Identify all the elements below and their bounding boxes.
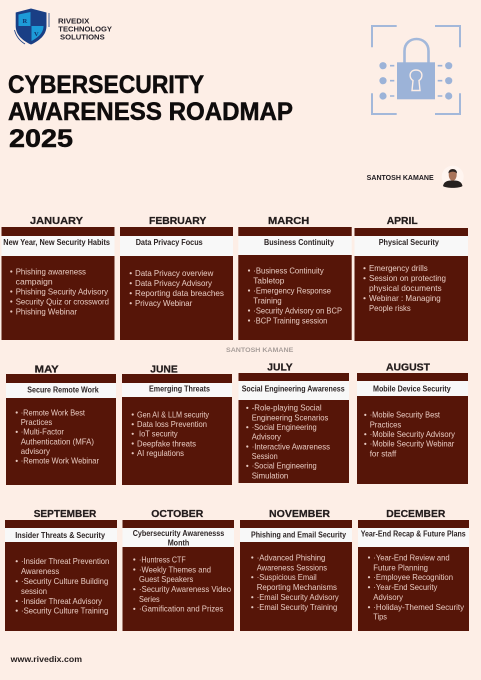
month heading: November: NOVEMBER [269,508,330,520]
card: March [238,215,352,340]
panel background: November [240,520,352,631]
month heading: February: FEBRUARY [149,215,206,227]
theme: October: Month [168,538,190,547]
activities: January: Phishing awareness [16,266,86,276]
card: April [354,215,468,341]
activities: March: ·Business Continuity [253,265,324,275]
author name: SANTOSH KAMANE [367,175,434,182]
activities: December: ·Year-End Review and [373,552,450,562]
panel background: July [238,373,349,483]
activities: March: ·Security Advisory on BCP [253,305,342,315]
activities: November: ·Advanced Phishing [257,552,326,562]
activities: September: Awareness [21,566,59,576]
activities: August: ·Mobile Security Advisory [370,429,456,439]
activities: June: Gen AI & LLM security [137,409,210,419]
panel background: October [122,520,234,631]
card: December [358,508,469,631]
activities: November: Awareness Sessions [257,562,327,572]
month heading: January: JANUARY [30,215,83,227]
activities: July: ·Social Engineering [252,461,317,471]
activities: October: ·Huntress CTF [139,554,186,564]
icon: padlock with circuit nodes [372,26,460,114]
activities: April: Session on protecting [369,273,446,283]
activities: October: ·Security Awareness Video [139,584,231,594]
activities: May: advisory [21,446,51,456]
activities: December: Future Planning [373,562,428,572]
month heading: March: MARCH [268,215,309,227]
activities: June: Deepfake threats [137,438,196,448]
activities: August [364,410,456,458]
activities: March: ·Emergency Response [253,285,331,295]
activities: February: Reporting data breaches [135,288,224,298]
card: January [2,215,114,340]
title: CYBERSECURITY [8,71,204,99]
activities: October: Series [139,594,160,604]
activities: July: ·Interactive Awareness [252,441,330,451]
card: June [122,363,232,485]
activities: April [363,263,446,313]
activities: January [10,266,109,316]
activities: April: Webinar : Managing [369,293,441,303]
icon: company shield logo [14,8,49,44]
activities: November: ·Email Security Advisory [257,592,339,602]
theme: February: Data Privacy Focus [136,238,203,247]
month heading: September: SEPTEMBER [34,508,97,520]
activities: May: ·Remote Work Webinar [21,456,99,466]
activities: November: Reporting Mechanisms [257,582,337,592]
activities: April: physical documents [369,283,442,293]
activities: March: ·BCP Training session [253,315,328,325]
panel background: May [6,374,116,485]
card: August [357,362,468,484]
theme: December: Year-End Recap & Future Plans [361,530,466,539]
activities: December: ·Holiday-Themed Security [373,602,465,612]
activities: February: Data Privacy Advisory [135,278,213,288]
activities: January: Security Quiz or crossword [16,296,109,306]
card: November [240,508,352,631]
icon: company shield logo: V [34,31,39,38]
panel background: April [354,228,468,341]
activities: July: ·Social Engineering [252,422,317,432]
activities: July: Session [252,451,278,461]
activities: October: ·Weekly Themes and [139,564,211,574]
title: 2025 [9,125,73,153]
activities: March [248,265,342,325]
activities: February [130,268,224,308]
theme: August: Mobile Device Security [373,384,451,393]
activities: March: Tabletop [253,275,285,285]
title: AWARENESS ROADMAP [8,98,293,126]
month heading: August: AUGUST [386,362,431,374]
panel background: March [238,227,352,340]
company name: RIVEDIX [58,16,89,25]
activities: July [246,403,330,480]
activities: August: ·Mobile Security Webinar [370,439,454,449]
activities: April: People risks [369,303,411,313]
company name [58,16,112,41]
activities: August: for staff [370,448,397,458]
panel background: February [120,227,233,340]
month heading: May: MAY [35,363,59,375]
watermark author name: SANTOSH KAMANE [226,347,294,354]
activities: May: ·Remote Work Best [21,407,86,417]
activities: May: Practices [21,417,52,427]
activities: September: ·Insider Threat Prevention [21,556,110,566]
panel background: June [122,374,232,485]
theme: May: Secure Remote Work [27,385,99,394]
activities: January: Phishing Webinar [16,306,77,316]
activities: April: Emergency drills [369,263,428,273]
activities: October [133,554,231,614]
activities: August: Practices [370,419,401,429]
activities: July: -Role-playing Social [252,403,322,413]
activities: June: IoT security [139,429,178,439]
activities: December: Advisory [373,592,404,602]
theme: October [133,529,225,547]
card: October [122,508,234,631]
activities: November [251,552,339,612]
activities: October: Guest Speakers [139,574,193,584]
activities: May: Authentication (MFA) [21,436,94,446]
month heading: July: JULY [267,362,293,374]
activities: June: AI regulations [137,448,184,458]
icon: company shield logo: R [22,18,28,25]
activities: March: Training [253,295,282,305]
activities: October: ·Gamification and Prizes [139,604,223,614]
theme: July: Social Engineering Awareness [242,384,345,393]
theme: October: Cybersecurity Awarenesss [133,529,225,538]
activities: June [132,409,210,458]
card: September [5,508,117,631]
month heading: June: JUNE [150,363,178,375]
company name: SOLUTIONS [60,32,105,41]
theme: April: Physical Security [379,238,440,247]
activities: June: Data loss Prevention [137,419,207,429]
month heading: October: OCTOBER [151,508,204,520]
activities: September: session [21,586,47,596]
footer website: www.rivedix.com [10,654,82,664]
activities: May: ·Multi-Factor [21,427,64,437]
theme: January: New Year, New Security Habits [3,238,111,247]
month heading: December: DECEMBER [386,508,446,520]
card: February [120,215,233,340]
activities: September: ·Security Culture Building [21,576,109,586]
activities: September: ·Security Culture Training [21,605,109,615]
activities: July: Engineering Scenarios [252,412,328,422]
activities: December: Tips [373,612,387,622]
card: July [238,362,349,483]
activities: November: ·Suspicious Email [257,572,317,582]
theme: March: Business Continuity [264,238,335,247]
panel background: January [2,227,114,340]
panel background: December [358,520,469,631]
activities: December: ·Year-End Security [373,582,438,592]
activities: November: ·Email Security Training [257,602,338,612]
icon: author portrait [442,166,464,188]
activities: May [16,407,99,466]
panel background: August [357,373,468,484]
activities: February: Data Privacy overview [135,268,214,278]
activities: February: Privacy Webinar [135,298,192,308]
card: May [6,363,116,485]
month heading: April: APRIL [387,215,418,227]
title [8,71,293,153]
activities: December [368,552,465,622]
panel background: September [5,520,117,631]
activities: July: Simulation [252,470,289,480]
company name: TECHNOLOGY [58,24,112,33]
theme: November: Phishing and Email Security [251,531,347,540]
activities: January: Phishing Security Advisory [16,286,109,296]
activities: August: ·Mobile Security Best [370,410,441,420]
activities: December: ·Employee Recognition [373,572,453,582]
theme: September: Insider Threats & Security [15,531,106,540]
activities: January: campaign [16,276,53,286]
activities: September [16,556,110,615]
activities: July: Advisory [252,432,282,442]
activities: September: ·Insider Threat Advisory [21,596,103,606]
theme: June: Emerging Threats [149,385,211,394]
